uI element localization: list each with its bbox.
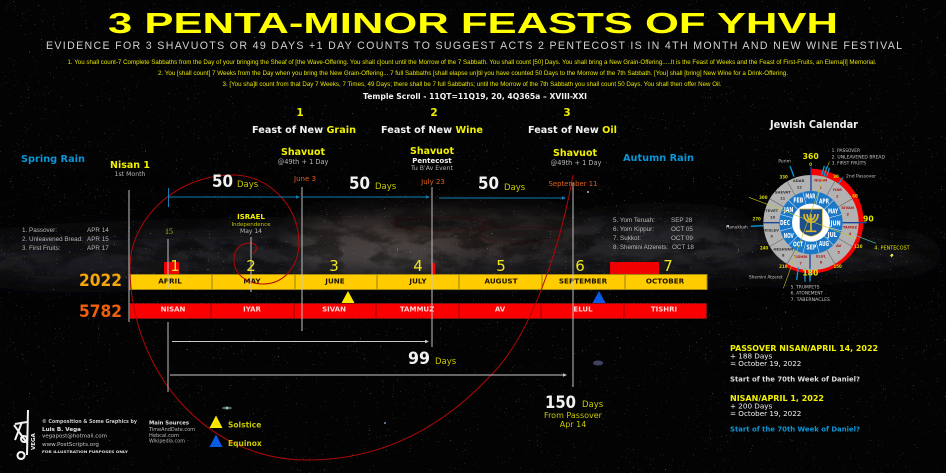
gregorian months in ring: AUG: [819, 240, 829, 248]
autumn feast list: OCT 18: [672, 244, 694, 251]
shavuot 3: @49th + 1 Day: [551, 159, 601, 167]
99 days label: [408, 349, 457, 369]
hebrew months in ring: 1: [819, 185, 822, 189]
author credits: Luis B. Vega: [42, 427, 81, 433]
degree labels: 210: [779, 264, 788, 269]
author logo: VEGA: [31, 432, 37, 450]
shavuot 1: [278, 147, 328, 183]
feast headings: Feast of New Oil: [528, 125, 617, 136]
gregorian month bar: SEPTEMBER: [559, 276, 608, 286]
shavuot 2: Tu B'Av Event: [410, 165, 454, 172]
equinox marker: [592, 291, 606, 303]
nisan 1 label: 1st Month: [115, 171, 146, 178]
spring feast list: APR 17: [87, 245, 109, 252]
hebrew months in ring: 2: [836, 195, 839, 199]
feast ticks: [751, 166, 843, 282]
month counters: [170, 257, 673, 275]
shavuot 3: Shavuot: [553, 148, 597, 159]
feast numbers: 2: [430, 107, 438, 119]
spring feast list: APR 15: [87, 236, 109, 243]
hebrew months in ring: 11: [780, 197, 786, 201]
gregorian months in ring: FEB: [793, 197, 803, 205]
hebrew month bar: SIVAN: [322, 306, 346, 314]
nisan 1 label: Nisan 1: [110, 160, 150, 171]
author credits: www.PostScripts.org: [42, 442, 99, 448]
gregorian month bar: MAY: [243, 276, 261, 286]
hebrew months in ring: 6: [820, 261, 823, 265]
autumn feast list: OCT 09: [671, 235, 693, 242]
nisan 15 marker: 15: [165, 227, 173, 236]
hebrew months in ring: SHEVAT: [775, 190, 791, 194]
wheel annotations: 1. PASSOVER: [832, 148, 860, 154]
israel independence label: Independence: [231, 222, 271, 228]
gregorian months in ring: SEP: [806, 243, 816, 251]
wheel annotations: Hanukkah: [726, 224, 748, 230]
99 days label: Days: [435, 357, 457, 367]
shavuot 2: Shavuot: [410, 146, 454, 157]
shavuot 3: September 11: [548, 180, 598, 188]
autumn feast list: 8. Shemini Atzerets:: [613, 244, 668, 251]
autumn rain label: Autumn Rain: [623, 153, 694, 164]
degree labels: [753, 152, 874, 278]
hebrew month bar: ELUL: [573, 306, 593, 314]
hebrew months in ring: 8: [782, 253, 785, 257]
spring feast list: 3. First Fruits:: [22, 245, 61, 252]
wheel annotations: 3. FIRST FRUITS: [832, 161, 866, 167]
shavuot 2: Pentecost: [412, 157, 452, 165]
legend: equinox: [210, 434, 262, 448]
degree labels: 270: [753, 217, 761, 222]
hebrew month bar: AV: [495, 306, 506, 314]
50 days labels: 50: [478, 174, 499, 194]
50 days labels: 50: [349, 174, 370, 194]
degree labels: 60: [852, 193, 858, 198]
gregorian months in ring: DEC: [780, 219, 790, 227]
legend: equinox: Equinox: [228, 439, 262, 448]
main sources: Hebcal.com: [149, 433, 179, 439]
degree labels: 120: [854, 244, 863, 249]
month counters: 6: [575, 257, 585, 275]
title: 3 PENTA-MINOR FEASTS OF YHVH: [108, 8, 838, 40]
solstice marker: [342, 291, 354, 303]
gregorian months in ring: [780, 193, 841, 251]
hebrew month bar: IYAR: [243, 306, 262, 314]
hebrew month bar: TISHRI: [651, 306, 677, 314]
israel independence label: May 14: [240, 228, 262, 235]
hebrew months in ring: TAMUZ: [843, 226, 857, 230]
gregorian months in ring: MAY: [828, 207, 838, 215]
autumn feast list: 6. Yom Kippur:: [613, 226, 654, 233]
month counters: 5: [496, 257, 506, 275]
shavuot 1: @49th + 1 Day: [278, 158, 328, 166]
50 days labels: Days: [504, 183, 526, 193]
legend: solstice: Solstice: [228, 420, 261, 430]
passover calculation note: [730, 343, 878, 384]
degree labels: 360: [803, 152, 819, 161]
year labels: 2022: [79, 271, 122, 290]
hebrew months in ring: AV: [836, 244, 842, 248]
wheel annotations: 2nd Passover: [846, 173, 876, 179]
150 days label: [544, 393, 604, 429]
gregorian month bar: [130, 274, 707, 290]
passover calculation note: Start of the 70th Week of Daniel?: [730, 374, 860, 384]
autumn feast list: [613, 217, 694, 251]
scripture quotations: 3. [You sha]ll count from that Day 7 Weeks, 7 Times, 49 Days; there shall be 7 full Sabbaths; until the Morrow of the 7th Sabbath you shall count 50 Days. You shall then offer New Oil.: [222, 82, 722, 88]
99 days label: 99: [408, 349, 430, 369]
spring feast list: APR 14: [87, 227, 109, 234]
wheel annotations: 7. TABERNACLES: [791, 297, 830, 303]
passover calculation note: PASSOVER NISAN/APRIL 14, 2022: [730, 343, 878, 353]
hebrew months in ring: TISHRI: [794, 255, 808, 259]
hebrew months in ring: 5: [837, 250, 840, 254]
quarter radial lines: [763, 167, 867, 280]
degree labels: 300: [759, 195, 768, 200]
150 days label: 150: [545, 393, 576, 413]
nisan calculation note: Start of the 70th Week of Daniel?: [730, 424, 860, 434]
subtitle: EVIDENCE FOR 3 SHAVUOTS OR 49 DAYS +1 DAY COUNTS TO SUGGEST ACTS 2 PENTECOST IS IN 4TH MONTH AND NEW WINE FESTIVAL: [46, 40, 902, 52]
scripture quotations: 1. You shall count-7 Complete Sabbaths from the Day of your bringing the Sheaf of [the Wave-Offering. You shall c]ount until the Morrow of the 7 Sabbath. You shall count [50] Days. You shall bring a New Grain-Offering.....It is the Feast of Weeks and the Feast of First-Fruits, an Eterna[l] Memorial.: [68, 60, 877, 66]
150 days label: Days: [582, 400, 604, 410]
autumn feast list: 7. Sukkot:: [613, 235, 641, 242]
israel independence label: [231, 213, 271, 235]
author credits: © Composition & Some Graphics by: [42, 419, 138, 425]
degree labels: 30: [833, 174, 839, 179]
shavuot 1: June 3: [293, 175, 316, 183]
nisan calculation note: = October 19, 2022: [730, 409, 801, 418]
hebrew months in ring: 3: [846, 212, 849, 216]
author credits: FOR ILLUSTRATION PURPOSES ONLY: [42, 450, 128, 454]
hebrew months in ring: NISAN: [814, 178, 827, 182]
hebrew months in ring: 7: [799, 261, 802, 265]
50 days labels: 50: [212, 172, 233, 192]
150 days label: From Passover: [544, 411, 603, 420]
hebrew month bar: NISAN: [161, 306, 186, 314]
white day-count arrows: [170, 340, 567, 377]
passover calculation note: + 188 Days: [730, 352, 773, 360]
gregorian months in ring: OCT: [793, 241, 803, 249]
gregorian months in ring: MAR: [805, 193, 815, 201]
scripture quotations: 2. You [shall count] 7 Weeks from the Day when you bring the New Grain-Offering... 7 full Sabbaths [shall elapse un]til you have counted 50 Days to the Morrow of the 7th Sabbath. [You] shall [bring] New Wine for a Drink-Offering.: [158, 71, 788, 77]
month counters: 1: [170, 257, 180, 275]
golden spiral: [130, 175, 573, 460]
month counters: 4: [413, 257, 423, 275]
gregorian months in ring: JUL: [827, 231, 838, 239]
wheel annotations: [726, 148, 911, 303]
gregorian months in ring: JUN: [830, 219, 841, 227]
50 days labels: Days: [375, 182, 397, 192]
source reference: Temple Scroll - 11QT=11Q19, 20, 4Q365a – XVIII-XXI: [363, 92, 587, 101]
gregorian month bar: OCTOBER: [646, 276, 685, 286]
spring feast list: [22, 227, 109, 252]
main sources: Main Sources: [149, 420, 189, 426]
month counters: 3: [329, 257, 339, 275]
wheel annotations: 5. TRUMPETS: [791, 284, 820, 290]
shavuot 3: [548, 148, 601, 188]
nisan 1 label: [110, 160, 150, 178]
nisan calculation note: + 200 Days: [730, 402, 773, 410]
gregorian month bar: JUNE: [324, 276, 345, 286]
main sources: TimeAndDate.com: [148, 427, 195, 433]
main sources: Wikipedia.com: [149, 438, 185, 444]
50 days labels: [212, 172, 526, 194]
gregorian month bar: AUGUST: [484, 276, 518, 286]
degree labels: 150: [834, 264, 842, 269]
autumn feast list: SEP 28: [671, 217, 693, 224]
feast numbers: [296, 107, 571, 119]
degree labels: 180: [802, 269, 818, 278]
autumn feast list: 5. Yom Teruah:: [613, 217, 655, 224]
author credits: vegapost@hotmail.com: [42, 434, 107, 440]
hebrew months in ring: TEVET: [765, 209, 779, 213]
legend: solstice: [210, 416, 261, 430]
wheel annotations: 4. PENTECOST: [874, 245, 911, 251]
israel independence label: ISRAEL: [237, 213, 265, 221]
year labels: [79, 271, 122, 321]
hebrew months in ring: ADAR: [793, 179, 805, 183]
month counters: 7: [663, 257, 673, 275]
month counters: 2: [246, 257, 256, 275]
spring feast list: 1. Passover:: [22, 227, 57, 234]
blue 50-day arrows: [168, 188, 566, 207]
autumn feast list: OCT 05: [671, 226, 693, 233]
degree labels: 330: [780, 175, 788, 180]
degree labels: 0: [809, 162, 812, 168]
gregorian months in ring: JAN: [783, 206, 793, 214]
hebrew months in ring: [764, 178, 857, 265]
main sources: [148, 420, 195, 444]
vertical date lines: [129, 183, 573, 392]
hebrew months in ring: 4: [849, 232, 852, 236]
gregorian months in ring: APR: [819, 197, 829, 205]
jewish calendar wheel: [726, 148, 911, 303]
feast headings: [252, 125, 617, 136]
red feast blocks: [164, 262, 659, 274]
feast headings: Feast of New Grain: [252, 125, 356, 136]
nisan calculation note: NISAN/APRIL 1, 2022: [730, 393, 824, 403]
wheel annotations: Purim: [778, 158, 791, 164]
hebrew months in ring: 10: [770, 215, 776, 219]
shavuot 2: July 23: [420, 178, 445, 186]
scripture quotations: [68, 60, 877, 88]
gregorian months in ring: NOV: [784, 232, 794, 240]
hebrew months in ring: HESHVAN: [773, 248, 793, 252]
degree labels: 90: [863, 214, 874, 223]
hebrew months in ring: KISLEV: [764, 228, 779, 232]
hebrew months in ring: SIVAN: [841, 206, 854, 210]
150 days label: Apr 14: [560, 420, 586, 429]
wheel annotations: 6. ATONEMENT: [791, 291, 824, 297]
degree labels: 240: [760, 245, 768, 250]
feast numbers: 1: [296, 107, 304, 119]
spring rain label: Spring Rain: [21, 154, 85, 165]
nisan calculation note: [730, 393, 860, 434]
spring feast list: 2. Unleavened Bread:: [22, 236, 83, 243]
feast alignment lines: [749, 162, 857, 288]
hebrew months in ring: IYAR: [833, 188, 842, 192]
passover calculation note: = October 19, 2022: [730, 359, 801, 368]
hebrew month bar: [130, 304, 706, 318]
gregorian month bar: APRIL: [158, 276, 182, 286]
hebrew month bar: TAMMUZ: [400, 306, 434, 314]
wheel annotations: 2. UNLEAVENED BREAD: [832, 154, 886, 160]
jewish calendar heading: Jewish Calendar: [769, 119, 859, 131]
feast numbers: 3: [563, 107, 571, 119]
gregorian month bar: JULY: [408, 276, 427, 286]
feast headings: Feast of New Wine: [381, 125, 483, 136]
author credits: [42, 419, 138, 454]
hebrew months in ring: 9: [770, 234, 773, 238]
hebrew months in ring: ELUL: [816, 254, 827, 258]
shavuot 2: [410, 146, 454, 186]
emblem of israel: [800, 209, 822, 236]
wheel annotations: Shemini Atzeret: [749, 274, 783, 280]
hebrew months in ring: 12: [797, 186, 802, 190]
50 days labels: Days: [237, 180, 259, 190]
author logo: [14, 410, 37, 459]
shavuot 1: Shavuot: [281, 147, 325, 158]
year labels: 5782: [79, 302, 122, 321]
